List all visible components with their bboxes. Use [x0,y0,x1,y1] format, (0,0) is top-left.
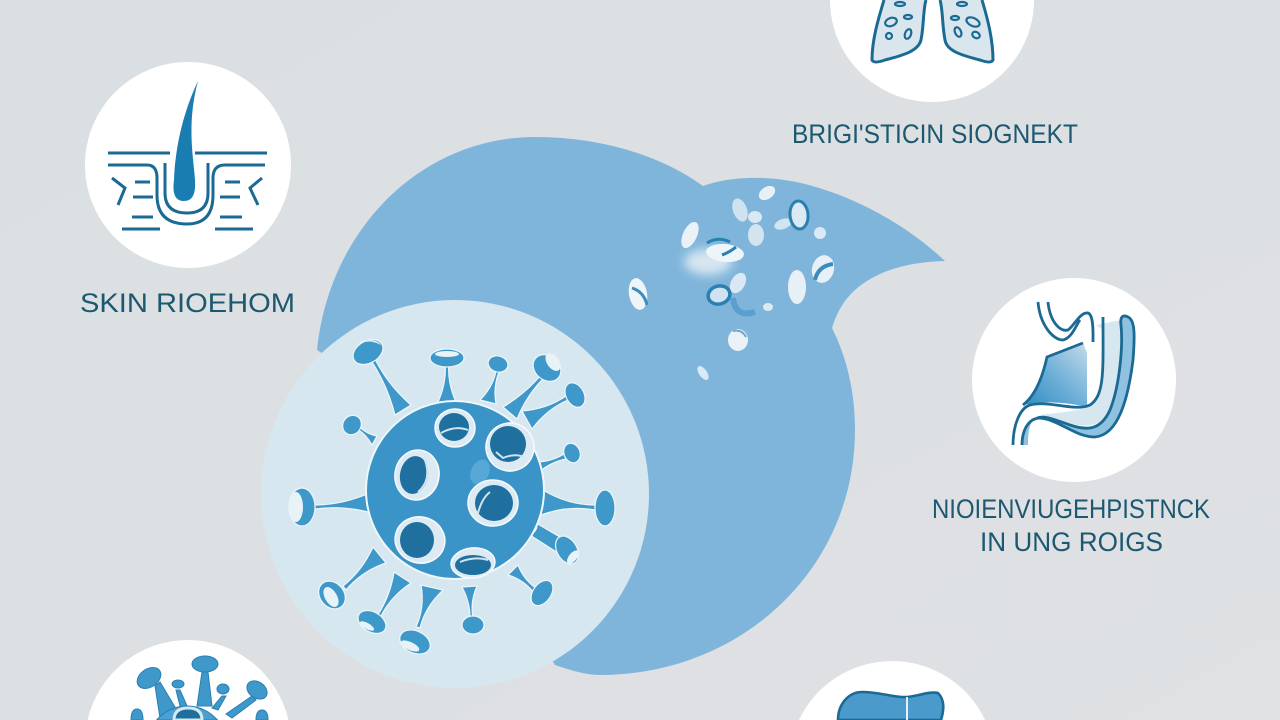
illustration: dispersing virus particles [626,183,837,382]
small virus pore [174,708,202,720]
virus pores [390,409,541,580]
illustration: central virus [289,334,615,659]
liver lobe divider [906,697,908,720]
hair shaft [173,81,198,201]
stomach body fill [1040,320,1122,426]
spike highlights [289,340,581,654]
label: stomach line one: NIOIENVIUGEHPISTNCK [932,494,1210,524]
stomach lining band [1022,316,1134,445]
icon: small virus, bottom left [88,640,288,720]
panel: large blue speech-bubble shape [317,137,945,675]
icon: stomach [972,278,1176,482]
virus spikes [289,334,615,659]
icon: lungs [830,0,1034,102]
icon: skin and hair follicle [85,62,291,268]
stomach contents [1023,343,1087,407]
label: stomach line two: IN UNG ROIGS [980,527,1163,557]
lung spots [884,2,981,40]
virus body [366,401,544,579]
body highlight [466,456,494,488]
label: skin: SKIN RIOEHOM [80,288,295,318]
icon: liver, bottom right [799,661,985,720]
panel: pale circle behind virus [261,300,649,688]
label: lungs: BRIGI'STICIN SIOGNEKT [792,119,1078,149]
